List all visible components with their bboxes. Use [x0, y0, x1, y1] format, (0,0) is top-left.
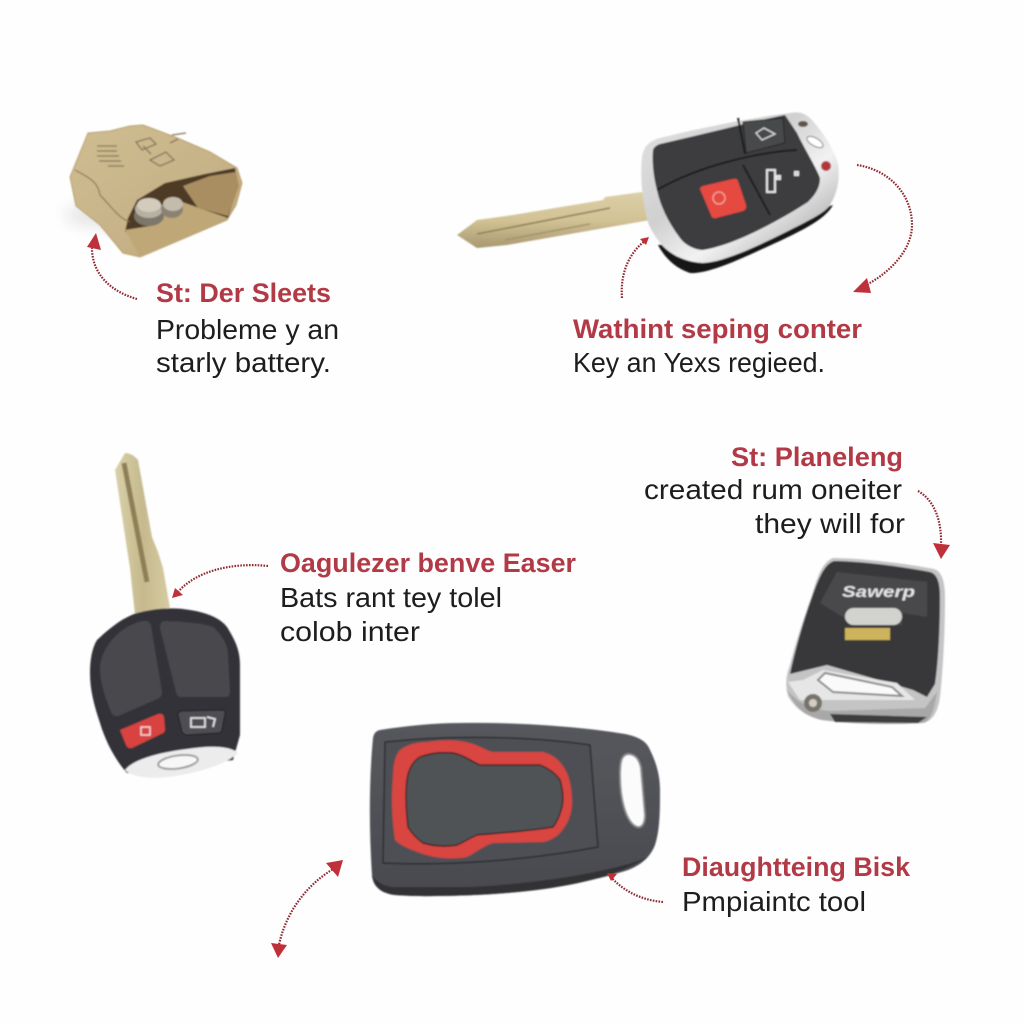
arrow: key to fob — [622, 237, 649, 298]
text block: bottom right: Diaughtteing Bisk — [682, 852, 911, 882]
blade — [115, 453, 170, 615]
panel: small textured fob right — [786, 558, 945, 724]
panel: torn paper battery pack — [65, 125, 242, 257]
text block: middle right: they will for — [755, 508, 905, 539]
text block: dead battery: St: Der Sleets — [156, 278, 331, 308]
panel: large grey fob bottom — [370, 723, 660, 896]
arrow: to small fob — [918, 491, 950, 559]
coins — [134, 197, 183, 226]
text block: bottom right: Pmpiaintc tool — [682, 886, 866, 917]
text block: dead battery: Probleme y an — [156, 314, 339, 345]
text block: top right: Wathint seping conter — [573, 314, 863, 344]
text block: middle right: St: Planeleng — [731, 442, 903, 472]
fob body — [641, 112, 839, 273]
arrow: double-headed bottom left — [271, 860, 343, 958]
arrow: to left key — [172, 565, 268, 598]
arrow: to paper pack — [87, 233, 137, 299]
text block: middle right: created rum oneiter — [644, 474, 902, 505]
text block: middle left: Bats rant tey tolel — [280, 582, 502, 613]
panel: key with rubber fob left — [90, 453, 240, 778]
panel: remote key top right — [457, 112, 839, 273]
text block: dead battery: starly battery. — [156, 347, 331, 378]
text block: top right: Key an Yexs regieed. — [573, 347, 825, 378]
text block: dead battery — [156, 278, 339, 378]
text block: bottom right — [682, 852, 911, 917]
red ring — [392, 740, 572, 858]
fob body — [90, 608, 240, 778]
text block: top right — [573, 314, 863, 378]
text block: middle right — [644, 442, 905, 539]
panel: small textured fob right: Sawerp — [842, 584, 915, 601]
text block: middle left: colob inter — [280, 616, 420, 647]
arrow: fob down right — [853, 165, 912, 293]
key blade — [457, 192, 650, 248]
arrow: to large fob — [607, 873, 663, 902]
text block: middle left — [280, 548, 576, 647]
text block: middle left: Oagulezer benve Easer — [280, 548, 576, 578]
